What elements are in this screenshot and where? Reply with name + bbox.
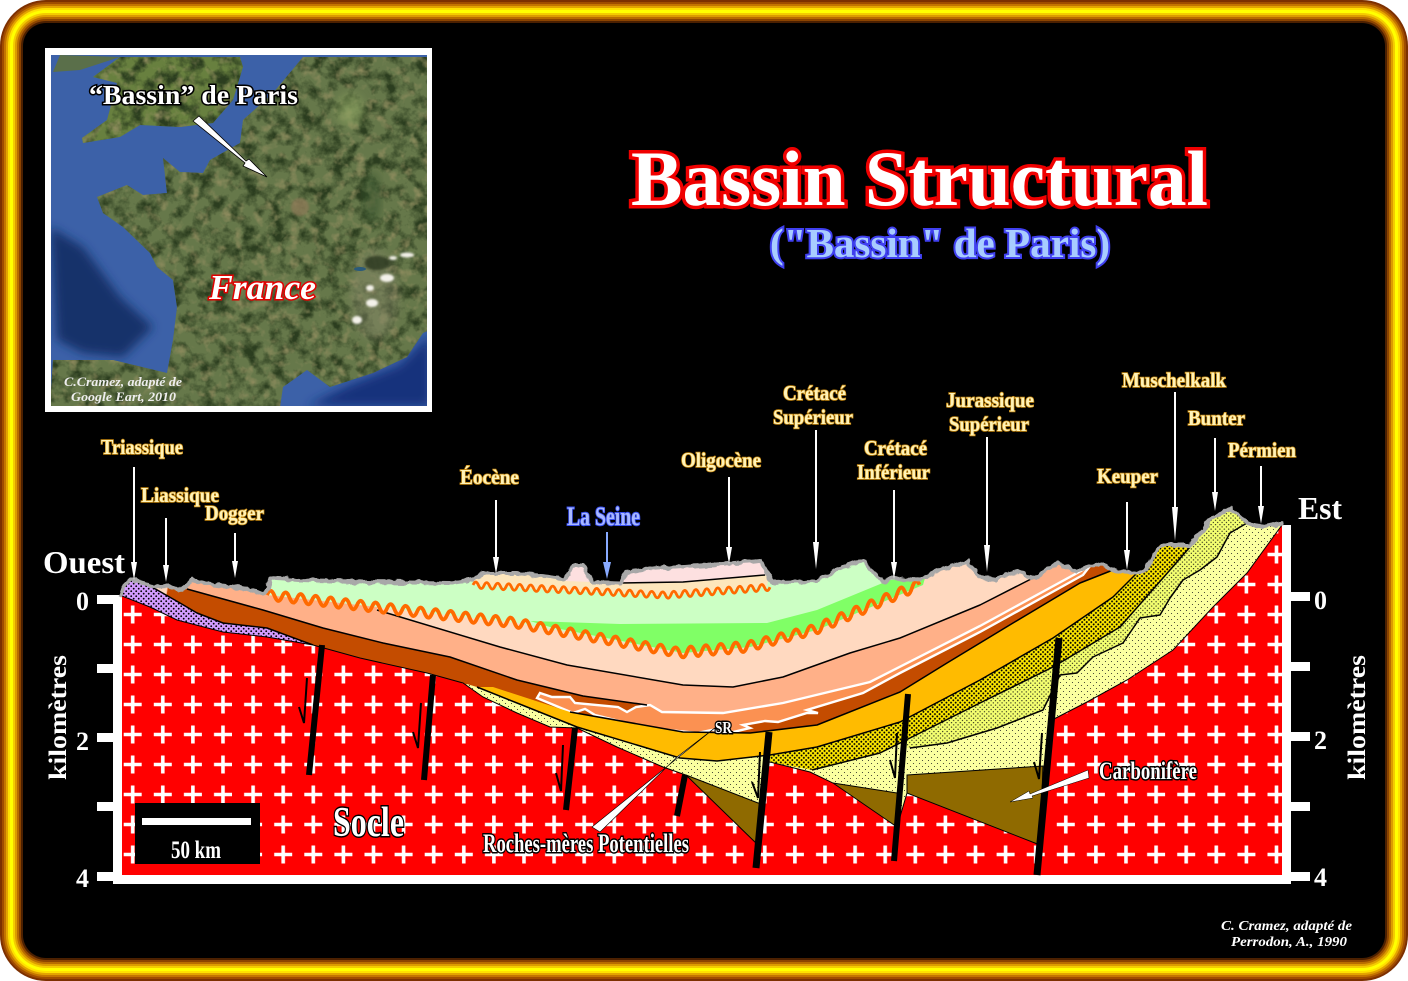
layer: Oligocene outlier <box>566 567 590 582</box>
label: Carbonifere: Carbonifère <box>1099 758 1197 785</box>
unconformity: upper wavy line <box>473 582 770 598</box>
label: Oligocene: Oligocène <box>681 448 761 472</box>
label: Cretace Inferieur: Inférieur <box>857 460 930 484</box>
panel: satellite map of France <box>45 48 432 412</box>
pointer to Carbonifere <box>1010 770 1089 802</box>
credit: C. Cramez, adapté de <box>1221 919 1352 934</box>
layer: Muschelkalk <box>770 535 1190 770</box>
map credit: C.Cramez, adapté de <box>64 375 182 389</box>
layer: Permien <box>466 520 1280 812</box>
label: Permien: Pérmien <box>1228 438 1296 462</box>
label: Cretace Superieur: Crétacé <box>783 381 846 405</box>
pointer to source rock <box>592 727 716 832</box>
label: Cretace Superieur: Supérieur <box>773 405 853 429</box>
subtitle: ("Bassin" de Paris) <box>770 220 1110 266</box>
layer: Cretace Inferieur green <box>530 578 925 653</box>
label: Roches-meres Potentielles: Roches-mères Potentielles <box>483 829 689 858</box>
label: Jurassique Superieur: Jurassique <box>946 388 1034 412</box>
layer: Carbonifere wedges <box>686 766 1043 850</box>
title: Bassin Structural <box>631 135 1208 222</box>
depth axis left <box>45 587 89 893</box>
label arrows <box>131 392 1264 582</box>
fault movement arrows <box>299 678 1042 798</box>
layer: Triassique <box>122 580 306 644</box>
label: Liassique: Liassique <box>141 483 219 507</box>
label: Dogger: Dogger <box>205 501 264 525</box>
label: SR: SR <box>715 718 733 737</box>
depth axis right: 2 <box>1314 726 1327 755</box>
layer: Keuper <box>479 570 1135 760</box>
credit: Perrodon, A., 1990 <box>1231 935 1347 950</box>
label: Keuper: Keuper <box>1097 464 1158 488</box>
map credit: Google Eart, 2010 <box>71 390 177 404</box>
unconformity: lower wavy line <box>267 581 920 657</box>
layer: Dogger <box>166 545 1160 712</box>
depth axis right <box>1314 586 1371 892</box>
layer: roche-mere SR <box>537 566 1090 733</box>
label: Bunter: Bunter <box>1188 406 1245 430</box>
faults <box>309 638 1059 875</box>
map label: France: France <box>208 268 316 307</box>
depth axis right: 0 <box>1314 586 1327 615</box>
cross-section diagram <box>97 480 1310 885</box>
layer: Cretace Superieur light green <box>267 562 922 653</box>
scale bar: 50 km <box>171 837 221 864</box>
scale bar <box>135 803 260 864</box>
label: Triassique: Triassique <box>101 435 183 459</box>
layer: Jurassique Superieur <box>155 519 1212 686</box>
depth axis right: kilomètres <box>1344 655 1371 780</box>
surface outline <box>120 508 1283 596</box>
sedimentary layers <box>122 512 1281 843</box>
label: Cretace Inferieur: Crétacé <box>864 436 927 460</box>
label: Socle: Socle <box>333 800 404 846</box>
map label: Bassin de Paris: “Bassin” de Paris <box>89 80 298 110</box>
label: Ouest: Ouest <box>43 544 125 580</box>
layer: Liassique <box>166 545 1160 732</box>
depth axis left: 4 <box>76 864 89 893</box>
layer: Eocene <box>472 574 768 595</box>
layer: Bunter <box>907 500 1247 748</box>
contact lines <box>152 523 1247 770</box>
label: La Seine: La Seine <box>567 502 640 531</box>
label: Eocene: Éocène <box>460 465 519 489</box>
depth axis left: 2 <box>76 727 89 756</box>
depth axis right: 4 <box>1314 863 1327 892</box>
label: Est: Est <box>1298 490 1342 526</box>
label: Jurassique Superieur: Supérieur <box>949 412 1029 436</box>
depth axis left: kilomètres <box>45 655 72 780</box>
section frame and depth ticks <box>97 525 1310 884</box>
layer: Oligocene <box>624 562 765 582</box>
label: Muschelkalk: Muschelkalk <box>1122 368 1226 392</box>
depth axis left: 0 <box>76 587 89 616</box>
map pointer arrow <box>193 116 267 177</box>
stratigraphic labels <box>101 368 1296 531</box>
basement: Socle <box>122 525 1282 875</box>
